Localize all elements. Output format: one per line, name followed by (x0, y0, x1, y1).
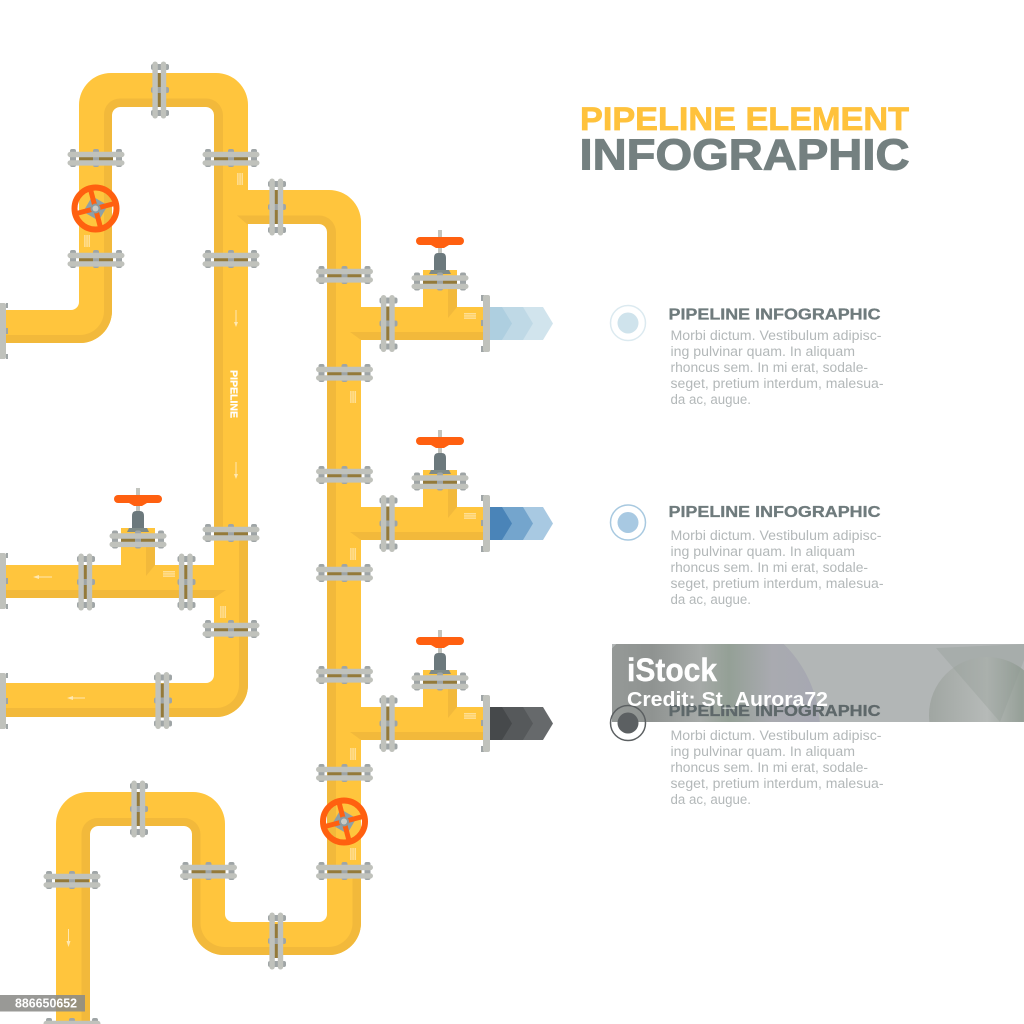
icon: wheel valve upper (74, 188, 116, 230)
title: PIPELINE ELEMENT (580, 101, 909, 137)
item 3: text: da ac, augue. (670, 792, 751, 807)
item 3: text: ing pulvinar quam. In aliquam (670, 744, 855, 759)
icon: gate valve 3 (412, 630, 468, 690)
end flanges: left (0, 303, 8, 729)
item 3: text: seget, pretium interdum, malesua- (670, 776, 884, 791)
watermark band (612, 644, 1024, 722)
pipe: main serpentine (56, 190, 361, 1024)
arrow: dark flow (490, 707, 553, 740)
image id tag (0, 995, 85, 1012)
item 3: text: PIPELINE INFOGRAPHIC (668, 703, 880, 720)
item 1: text (668, 306, 884, 407)
icon: gate valve left (110, 488, 166, 548)
flanges: horizontal (44, 149, 373, 1024)
item 2: marker (610, 505, 646, 540)
pipe markings (33, 173, 476, 947)
pipe: left branch with valve tee (0, 528, 226, 598)
image id tag: 886650652 (15, 996, 77, 1010)
item 2: text: ing pulvinar quam. In aliquam (670, 544, 855, 559)
pipe: right branch 3 (345, 670, 486, 740)
pipe: upper loop (0, 73, 248, 717)
arrow: pale blue flow (490, 307, 553, 340)
item 2: text: da ac, augue. (670, 592, 751, 607)
icon: gate valve 2 (412, 430, 468, 490)
arrow: blue flow (490, 507, 553, 540)
watermark text (627, 652, 828, 711)
item 3: text: rhoncus sem. In mi erat, sodale- (670, 760, 868, 775)
watermark text: Credit: St_Aurora72 (627, 689, 828, 711)
pipe: right branch 1 (345, 270, 486, 340)
item 2: text (668, 504, 884, 607)
item 2: text: seget, pretium interdum, malesua- (670, 576, 884, 591)
item 1: text: Morbi dictum. Vestibulum adipisc- (670, 328, 882, 343)
item 3: text (668, 703, 884, 807)
pipe: right branch 2 (345, 470, 486, 540)
item 1: text: da ac, augue. (670, 392, 751, 407)
pipe label: PIPELINE (228, 370, 240, 418)
item 1: marker (610, 306, 646, 340)
title: INFOGRAPHIC (580, 130, 910, 180)
title (580, 101, 910, 180)
item 2: text: rhoncus sem. In mi erat, sodale- (670, 560, 868, 575)
item 2: text: Morbi dictum. Vestibulum adipisc- (670, 528, 882, 543)
item 2: text: PIPELINE INFOGRAPHIC (668, 504, 880, 521)
item 1: text: ing pulvinar quam. In aliquam (670, 344, 855, 359)
flanges: vertical (77, 62, 398, 970)
item 1: text: PIPELINE INFOGRAPHIC (668, 306, 880, 323)
item 1: text: rhoncus sem. In mi erat, sodale- (670, 360, 868, 375)
icon: wheel valve lower (323, 800, 365, 842)
item 3: text: Morbi dictum. Vestibulum adipisc- (670, 728, 882, 743)
icon: gate valve 1 (412, 230, 468, 290)
item 1: text: seget, pretium interdum, malesua- (670, 376, 884, 391)
end flanges: right (481, 295, 490, 752)
item 3: marker (610, 706, 646, 740)
watermark text: iStock (627, 652, 717, 688)
